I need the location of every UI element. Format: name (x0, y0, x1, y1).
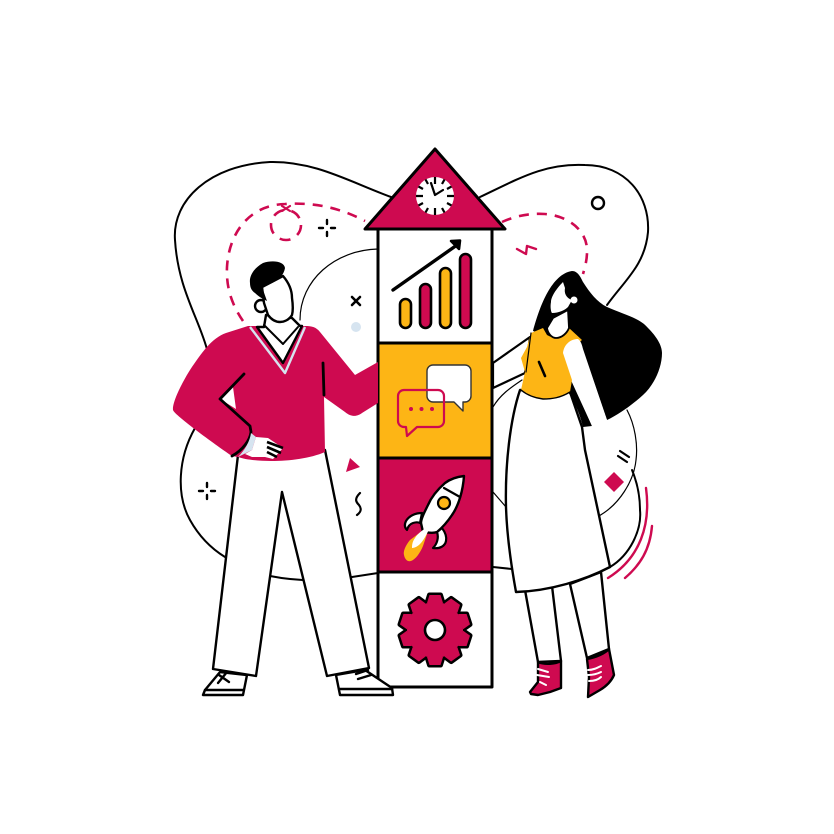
right shoe (336, 670, 393, 695)
mark: triangle (346, 458, 360, 472)
background blob outlines (175, 162, 648, 580)
face (262, 276, 293, 322)
mark: ring (592, 197, 604, 209)
left shoe (203, 672, 247, 695)
white bubble (427, 365, 471, 411)
shirt and collar (257, 315, 302, 363)
decorative marks (199, 197, 652, 578)
gear (399, 595, 471, 665)
top crease (539, 362, 545, 376)
ear (255, 300, 267, 312)
hair strand behind arm (568, 378, 592, 427)
legs (525, 572, 609, 662)
top edge line (526, 333, 531, 372)
neckline stripes (250, 327, 305, 373)
mark: x (352, 297, 360, 305)
dashed flight paths (227, 204, 587, 321)
mark: double dash (618, 451, 629, 462)
man (173, 261, 393, 695)
panel: rocket (378, 458, 492, 572)
left fin (405, 513, 422, 530)
neck (547, 310, 569, 338)
white arm (563, 339, 607, 426)
top (521, 328, 582, 399)
face (551, 282, 572, 313)
ear (570, 296, 578, 304)
mark: sparkle upper left (319, 220, 335, 236)
trousers (213, 450, 369, 676)
clock (416, 177, 454, 215)
window (438, 497, 450, 509)
tower frame (378, 229, 492, 687)
bubble dots (411, 407, 432, 411)
right boot (587, 649, 614, 697)
panel: chart (378, 229, 492, 343)
panel: speech (378, 343, 492, 458)
hand (245, 437, 283, 459)
left boot (530, 661, 561, 695)
mark: zigzag (517, 246, 536, 254)
woman (493, 271, 662, 697)
top waist line (521, 390, 570, 399)
mark: blue dot (351, 322, 361, 332)
panel: gear (378, 572, 492, 687)
flame (404, 525, 430, 561)
inner collar (264, 325, 298, 344)
rocket (404, 476, 464, 561)
mark: diamond (604, 472, 624, 492)
finger stripes (267, 442, 283, 457)
mark: squiggle (356, 493, 361, 515)
arm to tower (493, 337, 530, 388)
tower (365, 149, 505, 687)
sweater (173, 326, 378, 461)
mark: small cross on dashed circle (282, 206, 290, 211)
arm lines (220, 363, 324, 456)
rocket body (421, 476, 464, 533)
mark: motion arcs (608, 488, 652, 578)
skirt (506, 390, 610, 592)
right fin (433, 528, 446, 548)
cuff (238, 433, 256, 457)
bar chart (393, 240, 471, 328)
mark: sparkle lower left (199, 483, 215, 499)
crimson bubble (398, 390, 444, 436)
roof (365, 149, 505, 229)
nose line (444, 488, 460, 497)
speech bubbles (398, 365, 471, 436)
arm gap (220, 387, 236, 409)
hair (250, 261, 285, 301)
hair (533, 271, 662, 420)
inner flame (412, 525, 431, 548)
